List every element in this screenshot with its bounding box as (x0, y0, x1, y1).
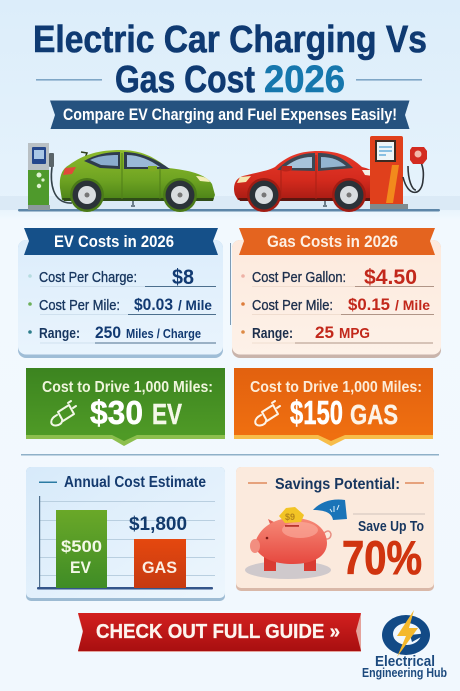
gas range: MPG (339, 325, 370, 342)
icon: gas pump (370, 136, 427, 209)
icon: piggy bank (245, 518, 331, 579)
gas bar value: $1,800 (129, 514, 187, 535)
callout: gas cost to drive 1,000 miles (234, 368, 433, 446)
gas cost per gallon: $4.50 (364, 266, 417, 289)
bar: EV: $500 (61, 537, 102, 556)
bar: gas: GAS (142, 558, 177, 577)
bar: EV (56, 510, 107, 588)
icon: fuel nozzle (255, 401, 280, 426)
callout: EV cost to drive 1,000 miles (26, 368, 225, 446)
icon: gold coin (279, 507, 304, 523)
title (33, 19, 427, 101)
logo: Electrical Engineering Hub (362, 610, 447, 680)
gas cost per gallon: Cost Per Gallon: (252, 269, 346, 286)
savings heading: Savings Potential: (275, 476, 400, 493)
gas cost per mile: Cost Per Mile: (252, 297, 333, 314)
EV costs heading: EV Costs in 2026 (54, 232, 174, 251)
EV cost per charge (39, 266, 194, 289)
EV cost per mile: / Mile (178, 297, 212, 313)
panel: gas costs (232, 228, 441, 358)
gas range: Range: (252, 325, 293, 342)
title: 2026 (264, 59, 345, 101)
EV range (39, 324, 201, 342)
EV cost per mile (39, 296, 212, 314)
gas cost per gallon (252, 266, 417, 289)
subtitle banner (50, 100, 410, 129)
subtitle banner: Compare EV Charging and Fuel Expenses Easily! (63, 106, 397, 124)
callout: EV cost to drive 1,000 miles: EV (152, 399, 183, 431)
gas cost per mile: $0.15 (348, 295, 390, 314)
panel: annual cost estimate (26, 467, 225, 601)
button: check out full guide: CHECK OUT FULL GUIDE » (96, 621, 340, 643)
icon: red gas car (234, 151, 378, 212)
gas costs heading: Gas Costs in 2026 (267, 232, 398, 251)
logo: Electrical Engineering Hub: Electrical (375, 653, 435, 670)
bar: EV: EV (70, 558, 92, 577)
EV cost per charge: Cost Per Charge: (39, 269, 137, 286)
EV range: Miles / Charge (126, 326, 201, 341)
EV range: Range: (39, 325, 80, 342)
gas cost per mile: / Mile (395, 297, 430, 313)
callout: gas cost to drive 1,000 miles: $150 (290, 394, 343, 431)
title: Gas Cost (115, 59, 255, 101)
icon: green electric car (60, 150, 215, 212)
callout: gas cost to drive 1,000 miles: Cost to Drive 1,000 Miles: (250, 379, 422, 396)
gas costs heading (239, 228, 435, 255)
panel: EV costs (18, 228, 223, 358)
icon: gold coin: $9 (285, 512, 295, 522)
panel: savings potential (236, 467, 434, 591)
bar: gas (134, 539, 186, 588)
gas cost per mile (252, 295, 430, 314)
EV cost per charge: $8 (172, 266, 194, 289)
button: check out full guide (78, 613, 361, 652)
gas range: 25 (315, 323, 334, 342)
logo: Electrical Engineering Hub: Engineering Hub (362, 666, 447, 680)
savings amount: Save Up To (358, 518, 424, 535)
icon: plug (51, 401, 76, 426)
EV costs heading (24, 228, 218, 255)
chart heading: Annual Cost Estimate (64, 474, 206, 491)
gas range (252, 323, 370, 342)
EV range: 250 (95, 324, 121, 342)
EV cost per mile: $0.03 (134, 296, 173, 314)
icon: blue speech badge (313, 499, 347, 520)
callout: EV cost to drive 1,000 miles: Cost to Drive 1,000 Miles: (42, 379, 213, 396)
icon: EV charging station (28, 143, 72, 210)
EV cost per mile: Cost Per Mile: (39, 297, 120, 314)
callout: gas cost to drive 1,000 miles: GAS (350, 399, 398, 430)
callout: EV cost to drive 1,000 miles: $30 (90, 394, 143, 431)
savings amount: 70% (342, 531, 422, 584)
